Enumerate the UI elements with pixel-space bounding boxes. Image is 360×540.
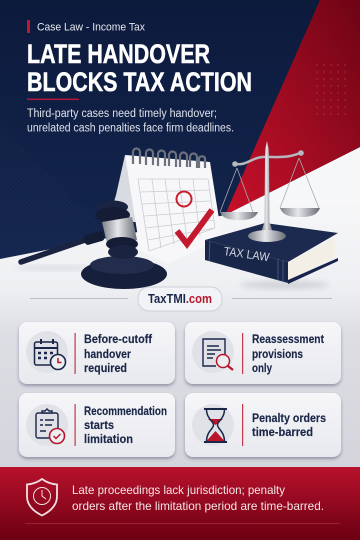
divider line left [30, 298, 128, 299]
icon: shield clock [27, 479, 57, 516]
icon: clipboard check [36, 409, 64, 444]
footer message: orders after the limitation period are time-barred. [72, 499, 324, 513]
card: penalty orders time-barred: time-barred [252, 425, 313, 439]
card: recommendation starts limitation [19, 393, 175, 457]
card: before-cutoff handover: required [84, 361, 127, 375]
title: BLOCKS TAX ACTION [27, 67, 252, 97]
illustration: desk calendar [108, 148, 222, 264]
card: reassessment provisions: Reassessment [252, 332, 324, 346]
card: penalty orders time-barred [185, 393, 341, 457]
illustration: gavel and block [15, 200, 167, 289]
subtitle: Third-party cases need timely handover; [27, 108, 217, 120]
eyebrow label: Case Law - Income Tax [37, 22, 145, 34]
navy header background [0, 0, 360, 259]
icon: hourglass [204, 409, 227, 442]
card: penalty orders time-barred: Penalty orders [252, 411, 326, 425]
card: reassessment provisions: only [252, 361, 272, 375]
red diagonal panel [225, 0, 360, 215]
brand pill [138, 287, 222, 311]
title underline [27, 98, 79, 100]
divider line right [232, 298, 332, 299]
illustration: law book [205, 223, 338, 289]
footer message: Late proceedings lack jurisdiction; penalty [72, 483, 285, 497]
card: before-cutoff handover: handover [84, 347, 131, 361]
dot pattern [311, 60, 346, 120]
footer message [72, 483, 324, 513]
card: before-cutoff handover [19, 322, 175, 384]
card: recommendation starts limitation: limitation [84, 432, 133, 446]
card: reassessment provisions [185, 322, 341, 384]
subtitle: unrelated cash penalties face firm deadlines. [27, 122, 234, 134]
card: before-cutoff handover: Before-cutoff [84, 332, 153, 346]
icon: calendar clock [34, 339, 66, 370]
title: LATE HANDOVER [27, 39, 210, 69]
card: recommendation starts limitation: Recommendation [84, 404, 167, 418]
illustration: law book: TAX LAW [223, 244, 271, 264]
brand pill: TaxTMI.com [148, 291, 212, 306]
footer band [0, 467, 360, 540]
diagonal stripe texture [0, 125, 100, 259]
title [27, 39, 252, 97]
illustration: balance scales [220, 141, 320, 242]
card: reassessment provisions: provisions [252, 347, 303, 361]
card: recommendation starts limitation: starts [84, 418, 114, 432]
subtitle [27, 108, 234, 134]
icon: document magnifier [203, 339, 233, 370]
